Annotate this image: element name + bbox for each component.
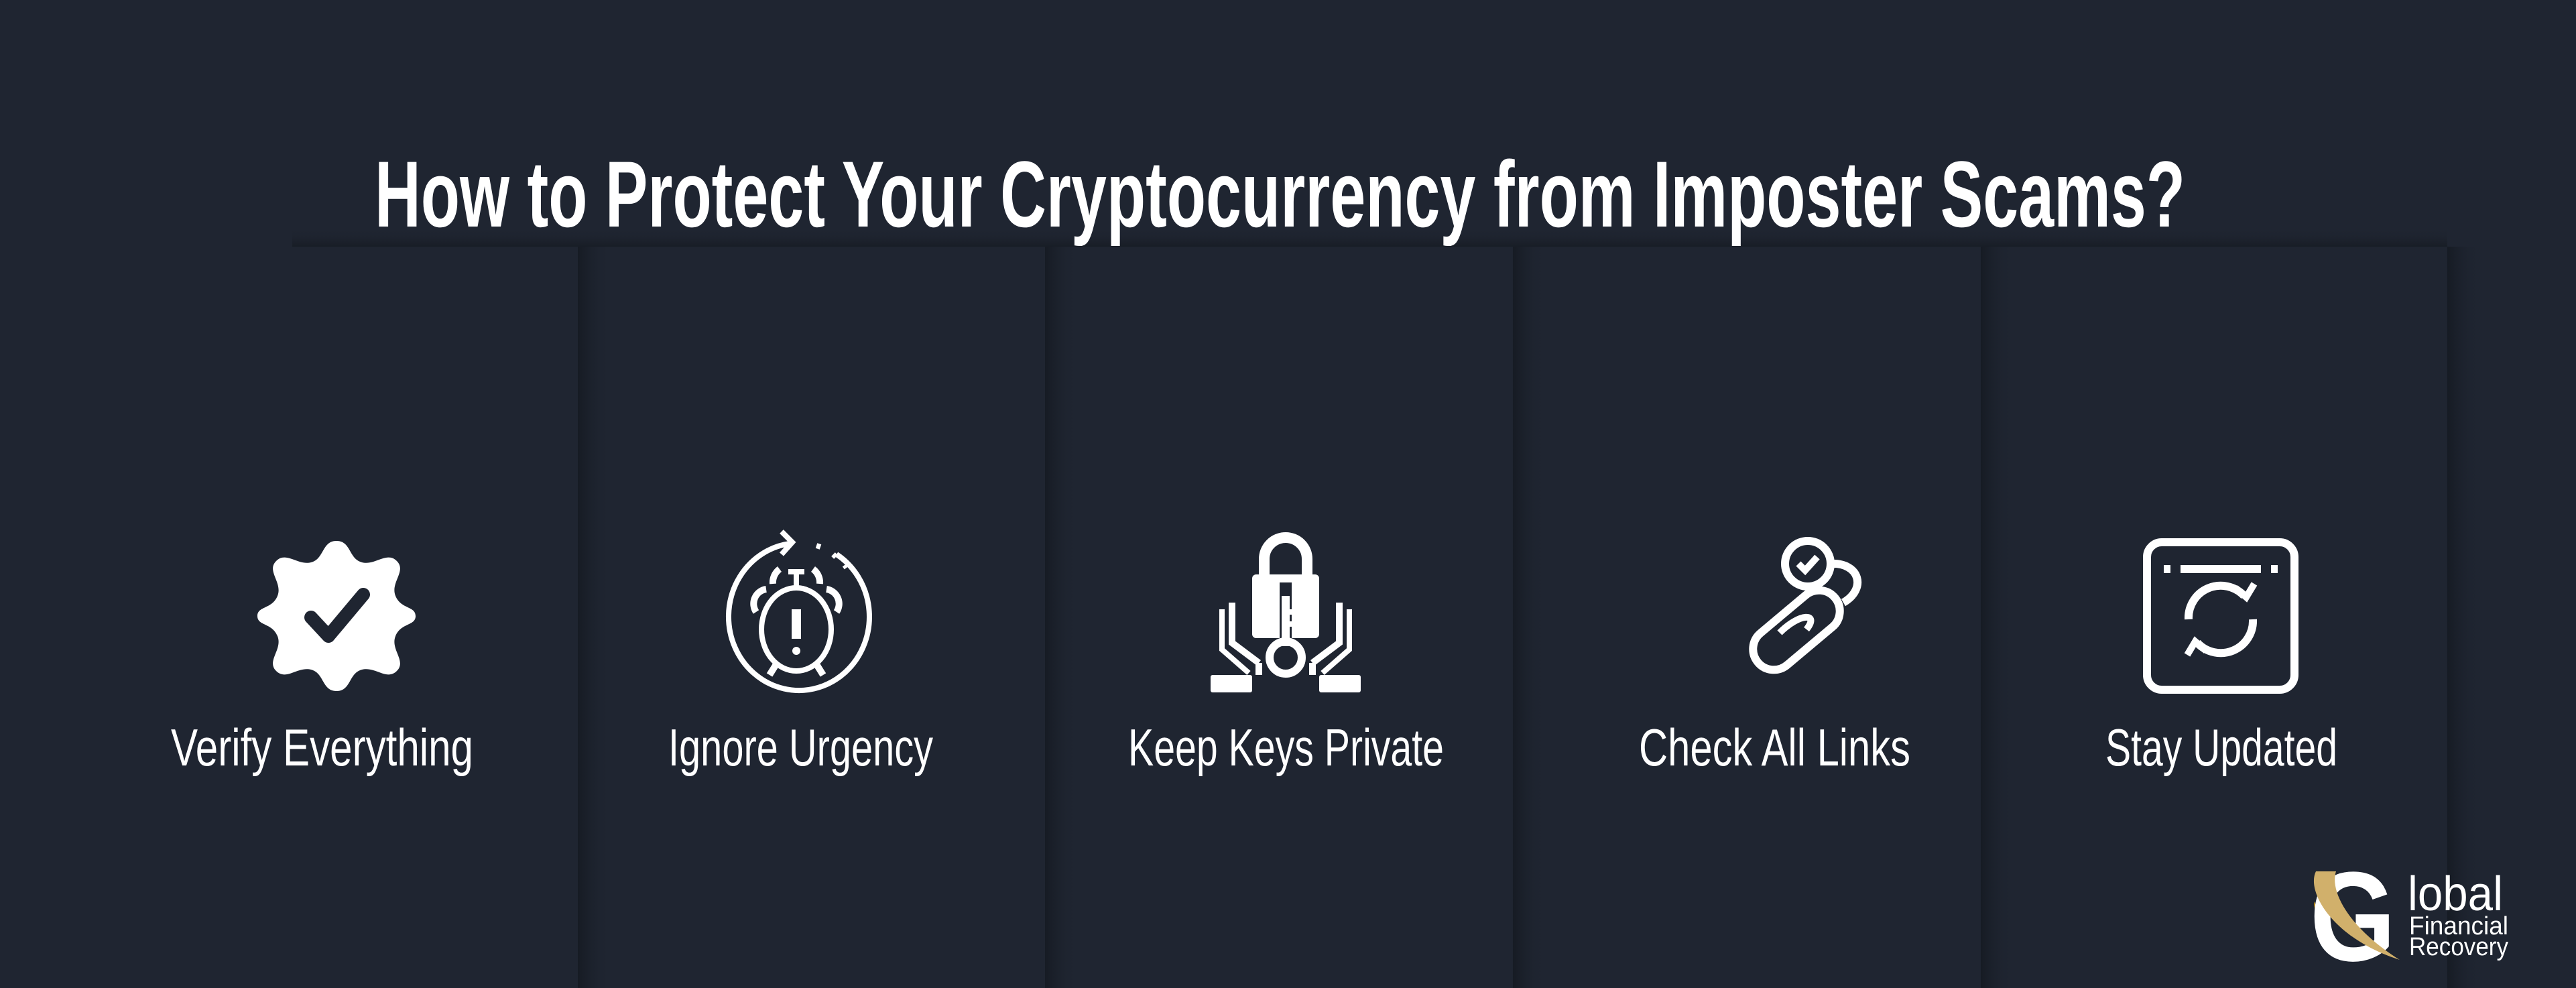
panel: urgency bbox=[578, 247, 1045, 988]
icon: stay updated bbox=[2147, 542, 2294, 690]
icon: verified badge bbox=[257, 541, 416, 691]
panel: verify bbox=[292, 247, 578, 988]
icon: alarm clock bbox=[729, 532, 869, 690]
icon: keys private bbox=[1211, 538, 1361, 692]
panel: updated bbox=[1981, 247, 2481, 988]
icon: chain link bbox=[1745, 541, 1857, 678]
logo: Recovery bbox=[2409, 933, 2508, 961]
panel: keys bbox=[1045, 247, 1513, 988]
panel top shadow bbox=[292, 228, 2447, 247]
logo: Financial bbox=[2409, 912, 2508, 940]
panel: links bbox=[1513, 247, 1981, 988]
label: keys: Keep Keys Private bbox=[1128, 718, 1444, 777]
logo bbox=[2310, 846, 2508, 988]
label: updated: Stay Updated bbox=[2105, 718, 2337, 777]
label: links: Check All Links bbox=[1639, 718, 1910, 777]
logo: lobal bbox=[2408, 867, 2503, 921]
label: verify: Verify Everything bbox=[171, 718, 473, 777]
logo: G bbox=[2310, 846, 2396, 988]
label: urgency: Ignore Urgency bbox=[668, 718, 933, 777]
